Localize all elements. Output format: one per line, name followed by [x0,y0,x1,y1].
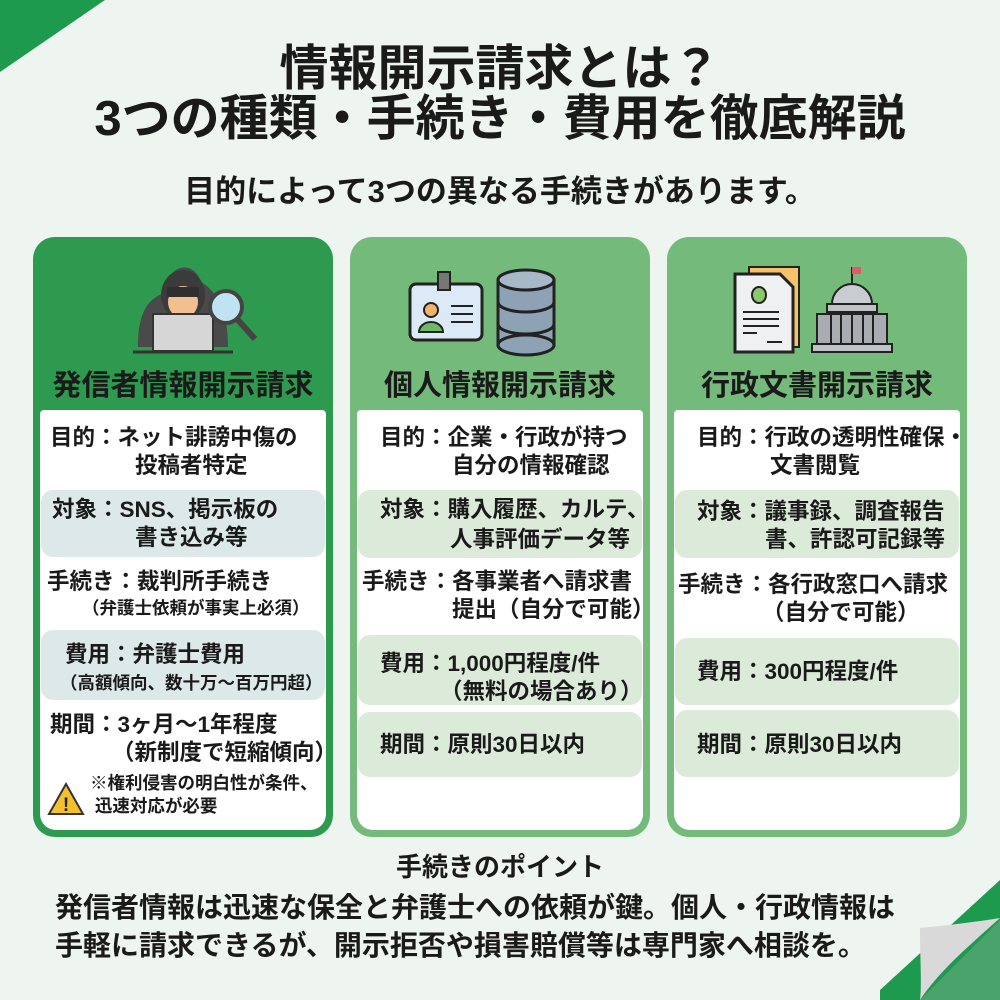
subtitle: 目的によって3つの異なる手続きがあります。 [184,174,816,209]
rows: panel 1 [47,425,337,765]
panel heading: 行政文書開示請求 [701,370,933,402]
text: 費用：弁護士費用 [65,642,245,667]
text: （新制度で短縮傾向） [112,740,337,765]
text: 目的：ネット誹謗中傷の [50,425,298,450]
text: 対象：議事録、調査報告 [697,499,945,524]
text: 期間：原則30日以内 [380,732,585,757]
callout: warning note: ※権利侵害の明白性が条件、 [90,773,318,793]
text: 人事評価データ等 [450,527,630,552]
text block: key points summary: 発信者情報は迅速な保全と弁護士への依頼が鍵。個人・行政情報は [55,892,895,923]
rows: panel 2 [362,425,655,757]
callout: warning note [47,773,318,816]
text: 期間：3ヶ月〜1年程度 [50,712,278,737]
icon: documents and government building [734,266,893,354]
panel heading: 個人情報開示請求 [384,370,616,402]
text: 目的：行政の透明性確保・ [697,425,967,450]
text: （無料の場合あり） [440,679,643,704]
callout: warning note: 迅速対応が必要 [95,796,217,816]
rows: panel 3 [678,425,967,757]
text: 自分の情報確認 [452,453,610,478]
text: 費用：1,000円程度/件 [380,651,600,676]
text: 目的：企業・行政が持つ [380,425,628,450]
icon: hooded hacker with magnifier [133,268,258,354]
heading: key points: 手続きのポイント [396,852,604,882]
text: 文書閲覧 [770,453,860,478]
text: 書き込み等 [135,525,248,550]
decoration: top-left corner [0,0,105,72]
title [94,42,906,146]
text: （弁護士依頼が事実上必須） [82,598,310,618]
text: 期間：原則30日以内 [697,732,902,757]
text: 対象：SNS、掲示板の [52,497,278,522]
text: 書、許認可記録等 [765,527,945,552]
text: 手続き：裁判所手続き [47,569,272,594]
panel heading: 発信者情報開示請求 [52,370,314,402]
text: 対象：購入履歴、カルテ、 [380,497,649,522]
icon: ID card and database [408,268,556,356]
text: 手続き：各事業者へ請求書 [362,569,632,594]
text: 投稿者特定 [135,453,248,478]
text: 提出（自分で可能） [452,597,655,622]
text: 費用：300円程度/件 [697,659,898,684]
text: （自分で可能） [762,600,920,625]
panel: personal information disclosure [350,237,650,837]
text block: key points summary: 手軽に請求できるが、開示拒否や損害賠償等は専門家へ相談を。 [55,930,866,961]
text: 手続き：各行政窓口へ請求 [678,572,948,597]
panel: sender information disclosure [33,237,333,837]
title: 情報開示請求とは？ [279,42,720,96]
decoration: bottom-right page curl [880,880,1000,1000]
title: 3つの種類・手続き・費用を徹底解説 [94,92,906,146]
callout: warning note: ! [63,795,69,816]
text: （高額傾向、数十万〜百万円超） [60,673,322,693]
text block: key points summary [55,892,895,961]
panel: administrative document disclosure [667,237,967,837]
